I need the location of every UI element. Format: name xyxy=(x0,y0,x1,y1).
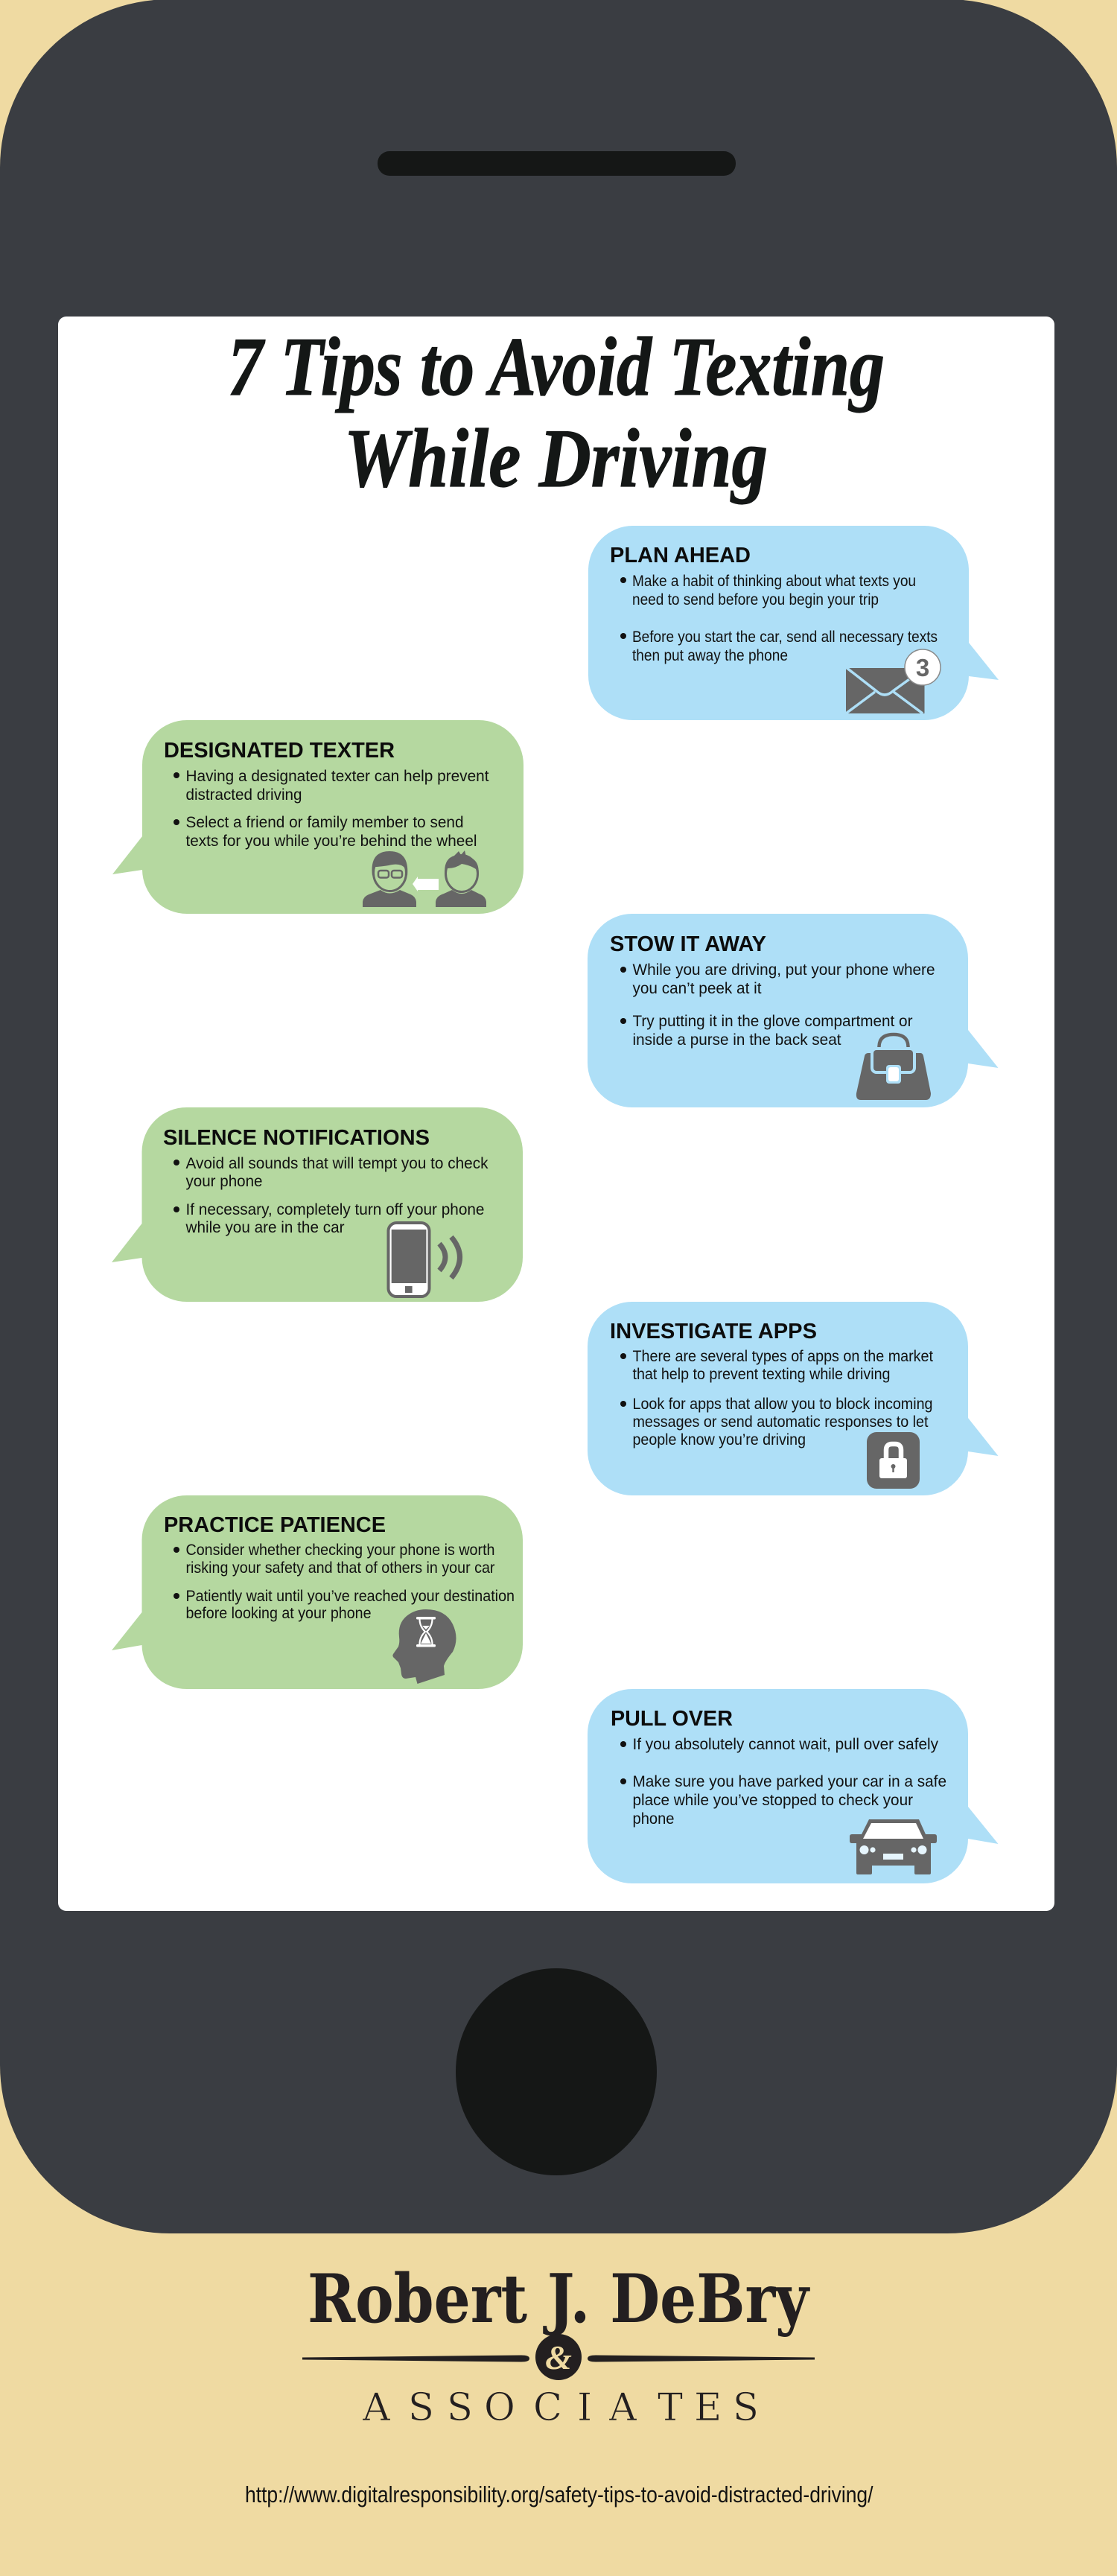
panel: investigate apps: Look for apps that allow you to block incoming xyxy=(633,1396,932,1413)
panel: plan ahead: Before you start the car, send all necessary texts xyxy=(632,629,938,646)
icon: car front xyxy=(850,1819,937,1874)
panel: pull over: If you absolutely cannot wait, pull over safely xyxy=(633,1736,938,1753)
icon: handbag xyxy=(856,1034,931,1100)
panel: pull over xyxy=(588,1689,998,1883)
panel: pull over: place while you’ve stopped to check your xyxy=(633,1792,913,1809)
panel: plan ahead: PLAN AHEAD xyxy=(610,544,751,567)
panel: designated texter: DESIGNATED TEXTER xyxy=(164,739,395,763)
logo: Robert J. DeBry & Associates: ASSOCIATES xyxy=(362,2386,759,2430)
panel: plan ahead: need to send before you begin your trip xyxy=(632,591,879,608)
source url: http://www.digitalresponsibility.org/safety-tips-to-avoid-distracted-driving/ xyxy=(245,2481,873,2507)
panel: silence notifications: while you are in the car xyxy=(185,1219,345,1236)
panel: designated texter xyxy=(112,720,524,914)
panel: practice patience: risking your safety and that of others in your car xyxy=(186,1559,495,1577)
panel: stow it away: Try putting it in the glove compartment or xyxy=(633,1013,913,1030)
panel: silence notifications: If necessary, completely turn off your phone xyxy=(186,1201,484,1218)
icon: vibrating phone xyxy=(389,1223,460,1297)
panel: silence notifications: your phone xyxy=(186,1173,262,1190)
icon: envelope with badge xyxy=(846,649,941,713)
panel: pull over: PULL OVER xyxy=(611,1707,733,1731)
panel: investigate apps xyxy=(588,1302,998,1495)
panel: silence notifications: Avoid all sounds that will tempt you to check xyxy=(186,1155,489,1172)
panel: practice patience: PRACTICE PATIENCE xyxy=(164,1513,386,1537)
logo: Robert J. DeBry & Associates: & xyxy=(545,2338,572,2376)
panel: stow it away xyxy=(588,914,998,1107)
logo: Robert J. DeBry & Associates xyxy=(302,2259,815,2430)
panel: practice patience: Patiently wait until you’ve reached your destination xyxy=(186,1588,515,1605)
panel: designated texter: Select a friend or family member to send xyxy=(186,814,463,831)
panel: pull over: phone xyxy=(633,1810,675,1828)
panel: designated texter: distracted driving xyxy=(186,786,302,804)
panel: plan ahead: then put away the phone xyxy=(632,647,788,664)
panel: investigate apps: people know you’re driving xyxy=(633,1431,806,1448)
icon: envelope with badge: 3 xyxy=(916,654,929,681)
panel: designated texter: texts for you while you’re behind the wheel xyxy=(186,833,477,850)
icon: padlock xyxy=(867,1432,920,1489)
panel: stow it away: While you are driving, put your phone where xyxy=(633,961,935,979)
logo: Robert J. DeBry & Associates: Robert J. DeBry xyxy=(308,2259,810,2338)
panel: investigate apps: that help to prevent texting while driving xyxy=(633,1366,891,1383)
title xyxy=(228,321,885,505)
panel: pull over: Make sure you have parked your car in a safe xyxy=(633,1773,946,1790)
title: While Driving xyxy=(344,413,768,505)
panel: stow it away: you can’t peek at it xyxy=(633,980,762,997)
icon: two people with arrow xyxy=(363,850,486,907)
phone screen panel xyxy=(58,317,1054,1911)
icon: head with hourglass xyxy=(392,1609,456,1684)
panel: investigate apps: There are several types of apps on the market xyxy=(633,1348,933,1365)
panel: stow it away: inside a purse in the back seat xyxy=(633,1031,841,1049)
panel: silence notifications: SILENCE NOTIFICATIONS xyxy=(163,1126,430,1150)
panel: practice patience: before looking at your phone xyxy=(186,1605,371,1622)
phone speaker xyxy=(378,151,736,176)
panel: investigate apps: INVESTIGATE APPS xyxy=(610,1320,817,1343)
panel: plan ahead: Make a habit of thinking about what texts you xyxy=(632,573,916,590)
panel: stow it away: STOW IT AWAY xyxy=(610,932,766,956)
panel: designated texter: Having a designated texter can help prevent xyxy=(186,768,489,785)
panel: plan ahead xyxy=(588,526,999,720)
panel: practice patience xyxy=(112,1495,523,1689)
panel: practice patience: Consider whether checking your phone is worth xyxy=(186,1542,494,1559)
phone home button xyxy=(456,1968,657,2175)
title: 7 Tips to Avoid Texting xyxy=(228,321,885,413)
panel: investigate apps: messages or send automatic responses to let xyxy=(633,1413,929,1431)
panel: silence notifications xyxy=(112,1107,523,1302)
